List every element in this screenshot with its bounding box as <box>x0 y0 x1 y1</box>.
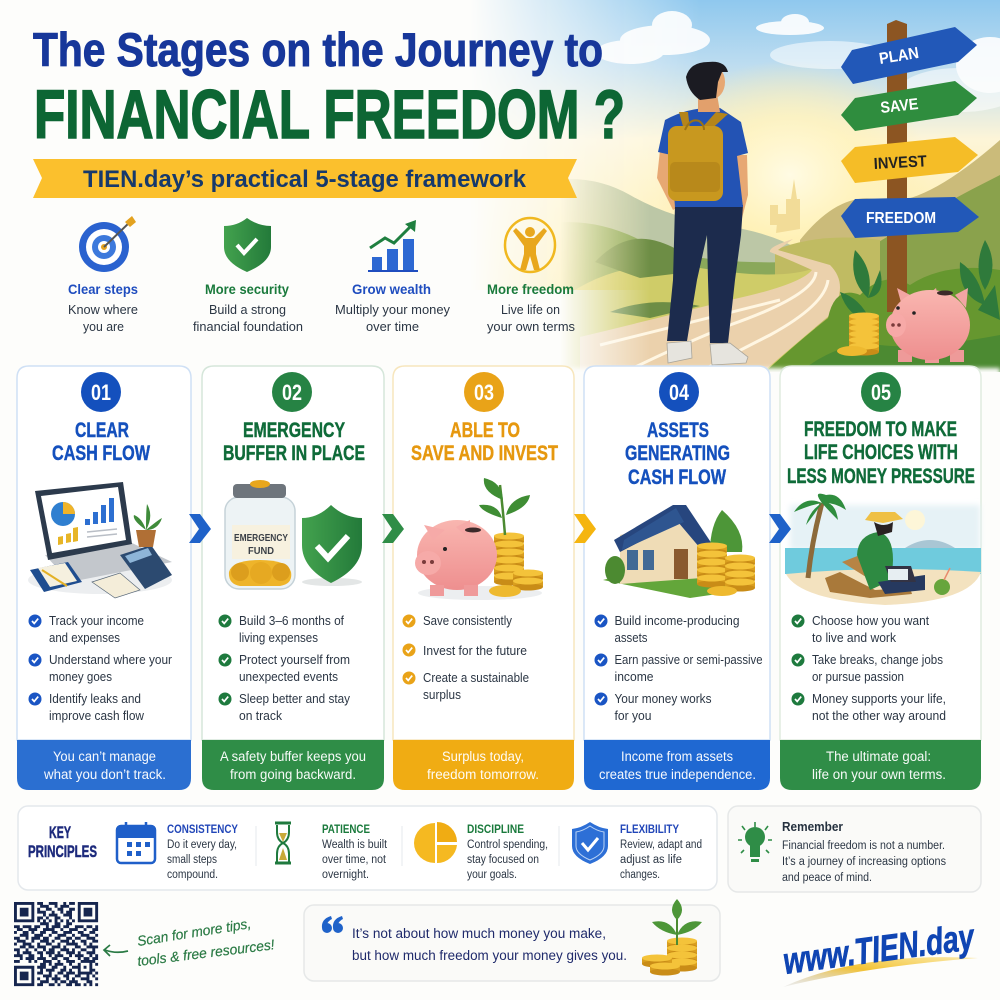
sign: save <box>841 81 977 131</box>
left back hill <box>572 180 790 262</box>
sign: save: SAVE <box>880 96 919 117</box>
dark trees <box>595 239 700 318</box>
distant city <box>770 179 800 233</box>
illustration: emergency fund jar: FUND <box>248 545 274 557</box>
arrow: stage 4 to 5 <box>769 514 791 543</box>
benefit: grow wealth: over time <box>366 319 419 334</box>
benefit: grow wealth: Grow wealth <box>352 281 431 297</box>
stage card 05 <box>780 366 981 790</box>
stage card 01 <box>17 366 191 790</box>
footer message <box>220 749 366 782</box>
sign: freedom: FREEDOM <box>866 210 936 227</box>
illustration: shield <box>302 505 362 586</box>
bullet list: assets <box>614 631 648 645</box>
bullet list: Sleep better and stay <box>239 692 351 706</box>
icon: person in circle <box>505 218 555 272</box>
principle: consistency: compound. <box>167 869 218 881</box>
principle: discipline <box>467 824 548 881</box>
principle: patience: over time, not <box>322 854 387 866</box>
hair <box>686 62 728 100</box>
bullet list: Earn passive or semi-passive <box>614 653 763 667</box>
bullet list <box>218 614 351 723</box>
footer band <box>202 740 384 790</box>
mid hills <box>570 222 775 292</box>
trousers <box>667 205 743 343</box>
number badge: 03 <box>474 380 494 405</box>
benefit: more freedom: Live life on <box>501 302 560 317</box>
footer message <box>43 749 166 782</box>
footer message: freedom tomorrow. <box>427 767 539 782</box>
clouds <box>596 11 1000 112</box>
footer band <box>17 740 191 790</box>
hero bottom fade <box>470 368 1000 376</box>
benefit: clear steps <box>68 216 138 334</box>
hero illustration: landscape <box>540 140 1000 372</box>
number badge: 05 <box>871 380 891 405</box>
traveller with backpack <box>657 62 748 365</box>
remember text: and peace of mind. <box>782 872 872 884</box>
sign: plan: PLAN <box>878 45 920 68</box>
principle: consistency <box>167 824 238 881</box>
benefit: clear steps: Clear steps <box>68 281 138 297</box>
illustration: coins with sprout <box>642 899 702 976</box>
benefit: more security: More security <box>205 281 289 297</box>
panel heading <box>28 823 97 861</box>
principle: flexibility <box>620 824 702 881</box>
illustration: piggy bank and coins <box>415 478 543 600</box>
benefit: more security <box>193 218 303 334</box>
signpost <box>841 20 979 312</box>
bullet list: Money supports your life, <box>812 692 946 706</box>
number badge <box>81 372 121 412</box>
number badge <box>464 372 504 412</box>
arrow: stage 3 to 4 <box>574 514 596 543</box>
heading: ASSETS <box>647 419 709 442</box>
footer message <box>599 749 756 782</box>
shoes <box>667 341 748 365</box>
bullet list: unexpected events <box>239 670 338 684</box>
footer message: what you don’t track. <box>43 767 166 782</box>
icon: growth chart <box>368 220 418 271</box>
illustration: laptop and calculator <box>28 482 172 598</box>
panel: quote <box>304 899 720 981</box>
footer message: creates true independence. <box>599 767 756 782</box>
leaves <box>840 240 1000 320</box>
footer message: A safety buffer keeps you <box>220 749 366 764</box>
principle: flexibility: Review, adapt and <box>620 839 702 851</box>
bullet list: Take breaks, change jobs <box>812 653 943 667</box>
remember text: Financial freedom is not a number. <box>782 840 945 852</box>
brand swoosh <box>783 957 978 987</box>
bullet list: for you <box>614 709 652 723</box>
quote text <box>352 926 627 963</box>
benefit: grow wealth: Multiply your money <box>335 302 450 317</box>
number badge: 02 <box>282 380 302 405</box>
sign: invest <box>841 137 978 183</box>
number badge: 01 <box>91 380 111 405</box>
bullet list: or pursue passion <box>812 670 904 684</box>
arms <box>657 150 748 222</box>
bullet list: surplus <box>423 688 461 702</box>
footer message: Surplus today, <box>442 749 524 764</box>
right back hills <box>800 140 1000 242</box>
panel: key principles <box>18 806 717 890</box>
footer message: from going backward. <box>230 767 356 782</box>
bullet list: money goes <box>49 670 112 684</box>
benefit: clear steps: you are <box>83 319 124 334</box>
card body <box>393 366 574 740</box>
icon: calendar <box>117 822 155 863</box>
card body <box>202 366 384 740</box>
footer message: You can’t manage <box>53 749 156 764</box>
heading <box>411 419 558 465</box>
banner: framework <box>33 159 577 198</box>
benefit: clear steps: Know where <box>68 302 138 317</box>
coin stack hero <box>837 312 879 356</box>
heading: ABLE TO <box>450 419 520 442</box>
footer band <box>584 740 770 790</box>
arrow: stage 2 to 3 <box>382 514 404 543</box>
bullet list <box>792 614 946 723</box>
bullet list: Build 3–6 months of <box>239 614 344 628</box>
heading: GENERATING <box>625 442 730 465</box>
bullet list: income <box>614 670 654 684</box>
bullet list: Understand where your <box>49 653 172 667</box>
principle: patience: PATIENCE <box>322 824 370 836</box>
title line one: The Stages on the Journey to <box>33 23 603 76</box>
sky gradient <box>488 0 1000 290</box>
bullet list: Identify leaks and <box>49 692 141 706</box>
principle: discipline: Control spending, <box>467 839 548 851</box>
heading: SAVE AND INVEST <box>411 442 558 465</box>
heading <box>223 419 365 465</box>
bullet list: Create a sustainable <box>423 671 529 685</box>
footer band <box>393 740 574 790</box>
principle: flexibility: adjust as life <box>620 854 682 866</box>
sign: plan <box>841 27 977 84</box>
principle: consistency: Do it every day, <box>167 839 237 851</box>
bullet list: Choose how you want <box>812 614 929 628</box>
heading: CASH FLOW <box>628 466 726 489</box>
panel box <box>304 905 720 981</box>
benefit: more security: financial foundation <box>193 319 303 334</box>
icon: target <box>79 216 136 272</box>
bullet list <box>402 614 529 702</box>
remember heading: Remember <box>782 819 843 834</box>
benefit: more freedom: your own terms <box>487 319 575 334</box>
sign: invest: INVEST <box>873 153 927 173</box>
arrow: stage 1 to 2 <box>189 514 211 543</box>
QR code <box>14 903 98 985</box>
principle: flexibility: FLEXIBILITY <box>620 824 679 836</box>
head <box>699 65 725 99</box>
footer message: The ultimate goal: <box>826 749 931 764</box>
road <box>580 239 840 372</box>
bullet list: Track your income <box>49 614 144 628</box>
panel box <box>728 806 981 892</box>
number badge <box>861 372 901 412</box>
card body <box>780 366 981 740</box>
panel heading: PRINCIPLES <box>28 842 97 861</box>
bullet list: Invest for the future <box>423 644 527 658</box>
title line two: FINANCIAL FREEDOM ? <box>34 76 625 153</box>
panel: remember <box>728 806 981 892</box>
remember text: It’s a journey of increasing options <box>782 856 946 868</box>
benefit: more freedom <box>487 218 575 334</box>
heading: EMERGENCY <box>243 419 345 442</box>
backpack <box>668 112 728 201</box>
card body <box>17 366 191 740</box>
principle: patience: Wealth is built <box>322 839 388 851</box>
bullet list: to live and work <box>812 631 897 645</box>
neck <box>698 94 720 112</box>
principle: flexibility: changes. <box>620 869 660 881</box>
icon: blue shield <box>572 822 608 864</box>
bullet list: on track <box>239 709 283 723</box>
number badge <box>659 372 699 412</box>
card body <box>584 366 770 740</box>
bullet list: and expenses <box>49 631 120 645</box>
benefit: more freedom: More freedom <box>487 281 574 297</box>
principle: discipline: DISCIPLINE <box>467 824 524 836</box>
principle: patience: overnight. <box>322 869 369 881</box>
heading <box>787 418 975 488</box>
scan caption <box>136 915 275 969</box>
benefit: grow wealth <box>335 220 450 334</box>
heading: BUFFER IN PLACE <box>223 442 365 465</box>
principle: discipline: stay focused on <box>467 854 539 866</box>
heading: CLEAR <box>75 419 129 442</box>
stage card 02 <box>202 366 384 790</box>
number badge: 04 <box>669 380 690 405</box>
quote mark <box>322 916 343 933</box>
sign: freedom <box>841 197 979 238</box>
bullet list: improve cash flow <box>49 709 145 723</box>
stage card 03 <box>393 366 574 790</box>
quote text: but how much freedom your money gives you. <box>352 948 627 963</box>
icon: pie chart <box>414 822 457 863</box>
post <box>887 20 907 312</box>
number badge <box>272 372 312 412</box>
icon: hourglass <box>275 823 291 863</box>
bullet list: not the other way around <box>812 709 946 723</box>
heading <box>625 419 730 489</box>
illustration: emergency fund jar <box>225 480 295 589</box>
footer message <box>812 749 946 782</box>
sun glow <box>692 69 887 244</box>
roadside bushes <box>765 268 1000 372</box>
footer message: Income from assets <box>621 749 733 764</box>
principle: discipline: your goals. <box>467 869 517 881</box>
arrow: points to QR <box>104 945 128 956</box>
bullet list: Save consistently <box>423 614 513 628</box>
bullet list: Your money works <box>614 692 712 706</box>
footer band <box>780 740 981 790</box>
heading: CASH FLOW <box>52 442 150 465</box>
principle: consistency: small steps <box>167 854 217 866</box>
bullet list: living expenses <box>239 631 318 645</box>
yellow fields <box>560 265 815 372</box>
icon: shield <box>224 218 271 272</box>
panel box <box>18 806 717 890</box>
shirt <box>658 108 748 207</box>
quote text: It’s not about how much money you make, <box>352 926 606 941</box>
panel heading: KEY <box>49 823 71 842</box>
road stripes <box>600 272 828 372</box>
footer message: life on your own terms. <box>812 767 946 782</box>
bullet list <box>28 614 172 723</box>
illustration: beach scene <box>785 494 981 605</box>
piggy bank hero <box>886 288 970 363</box>
principle: consistency: CONSISTENCY <box>167 824 238 836</box>
principle: patience <box>322 824 388 881</box>
bullet list: Protect yourself from <box>239 653 350 667</box>
bullet list <box>594 614 763 723</box>
scan caption: tools & free resources! <box>136 936 275 969</box>
heading <box>52 419 150 465</box>
illustration: house and coins <box>603 505 755 598</box>
stage card 04 <box>584 366 770 790</box>
illustration: emergency fund jar: EMERGENCY <box>234 532 288 544</box>
benefit: more security: Build a strong <box>209 302 286 317</box>
banner: framework: TIEN.day’s practical 5-stage framework <box>83 166 527 193</box>
bullet list: Build income-producing <box>614 614 740 628</box>
remember text <box>782 840 946 884</box>
scan caption: Scan for more tips, <box>136 915 252 949</box>
icon: light bulb <box>738 822 772 862</box>
footer message <box>427 749 539 782</box>
hero illustration: sky <box>488 0 1000 290</box>
